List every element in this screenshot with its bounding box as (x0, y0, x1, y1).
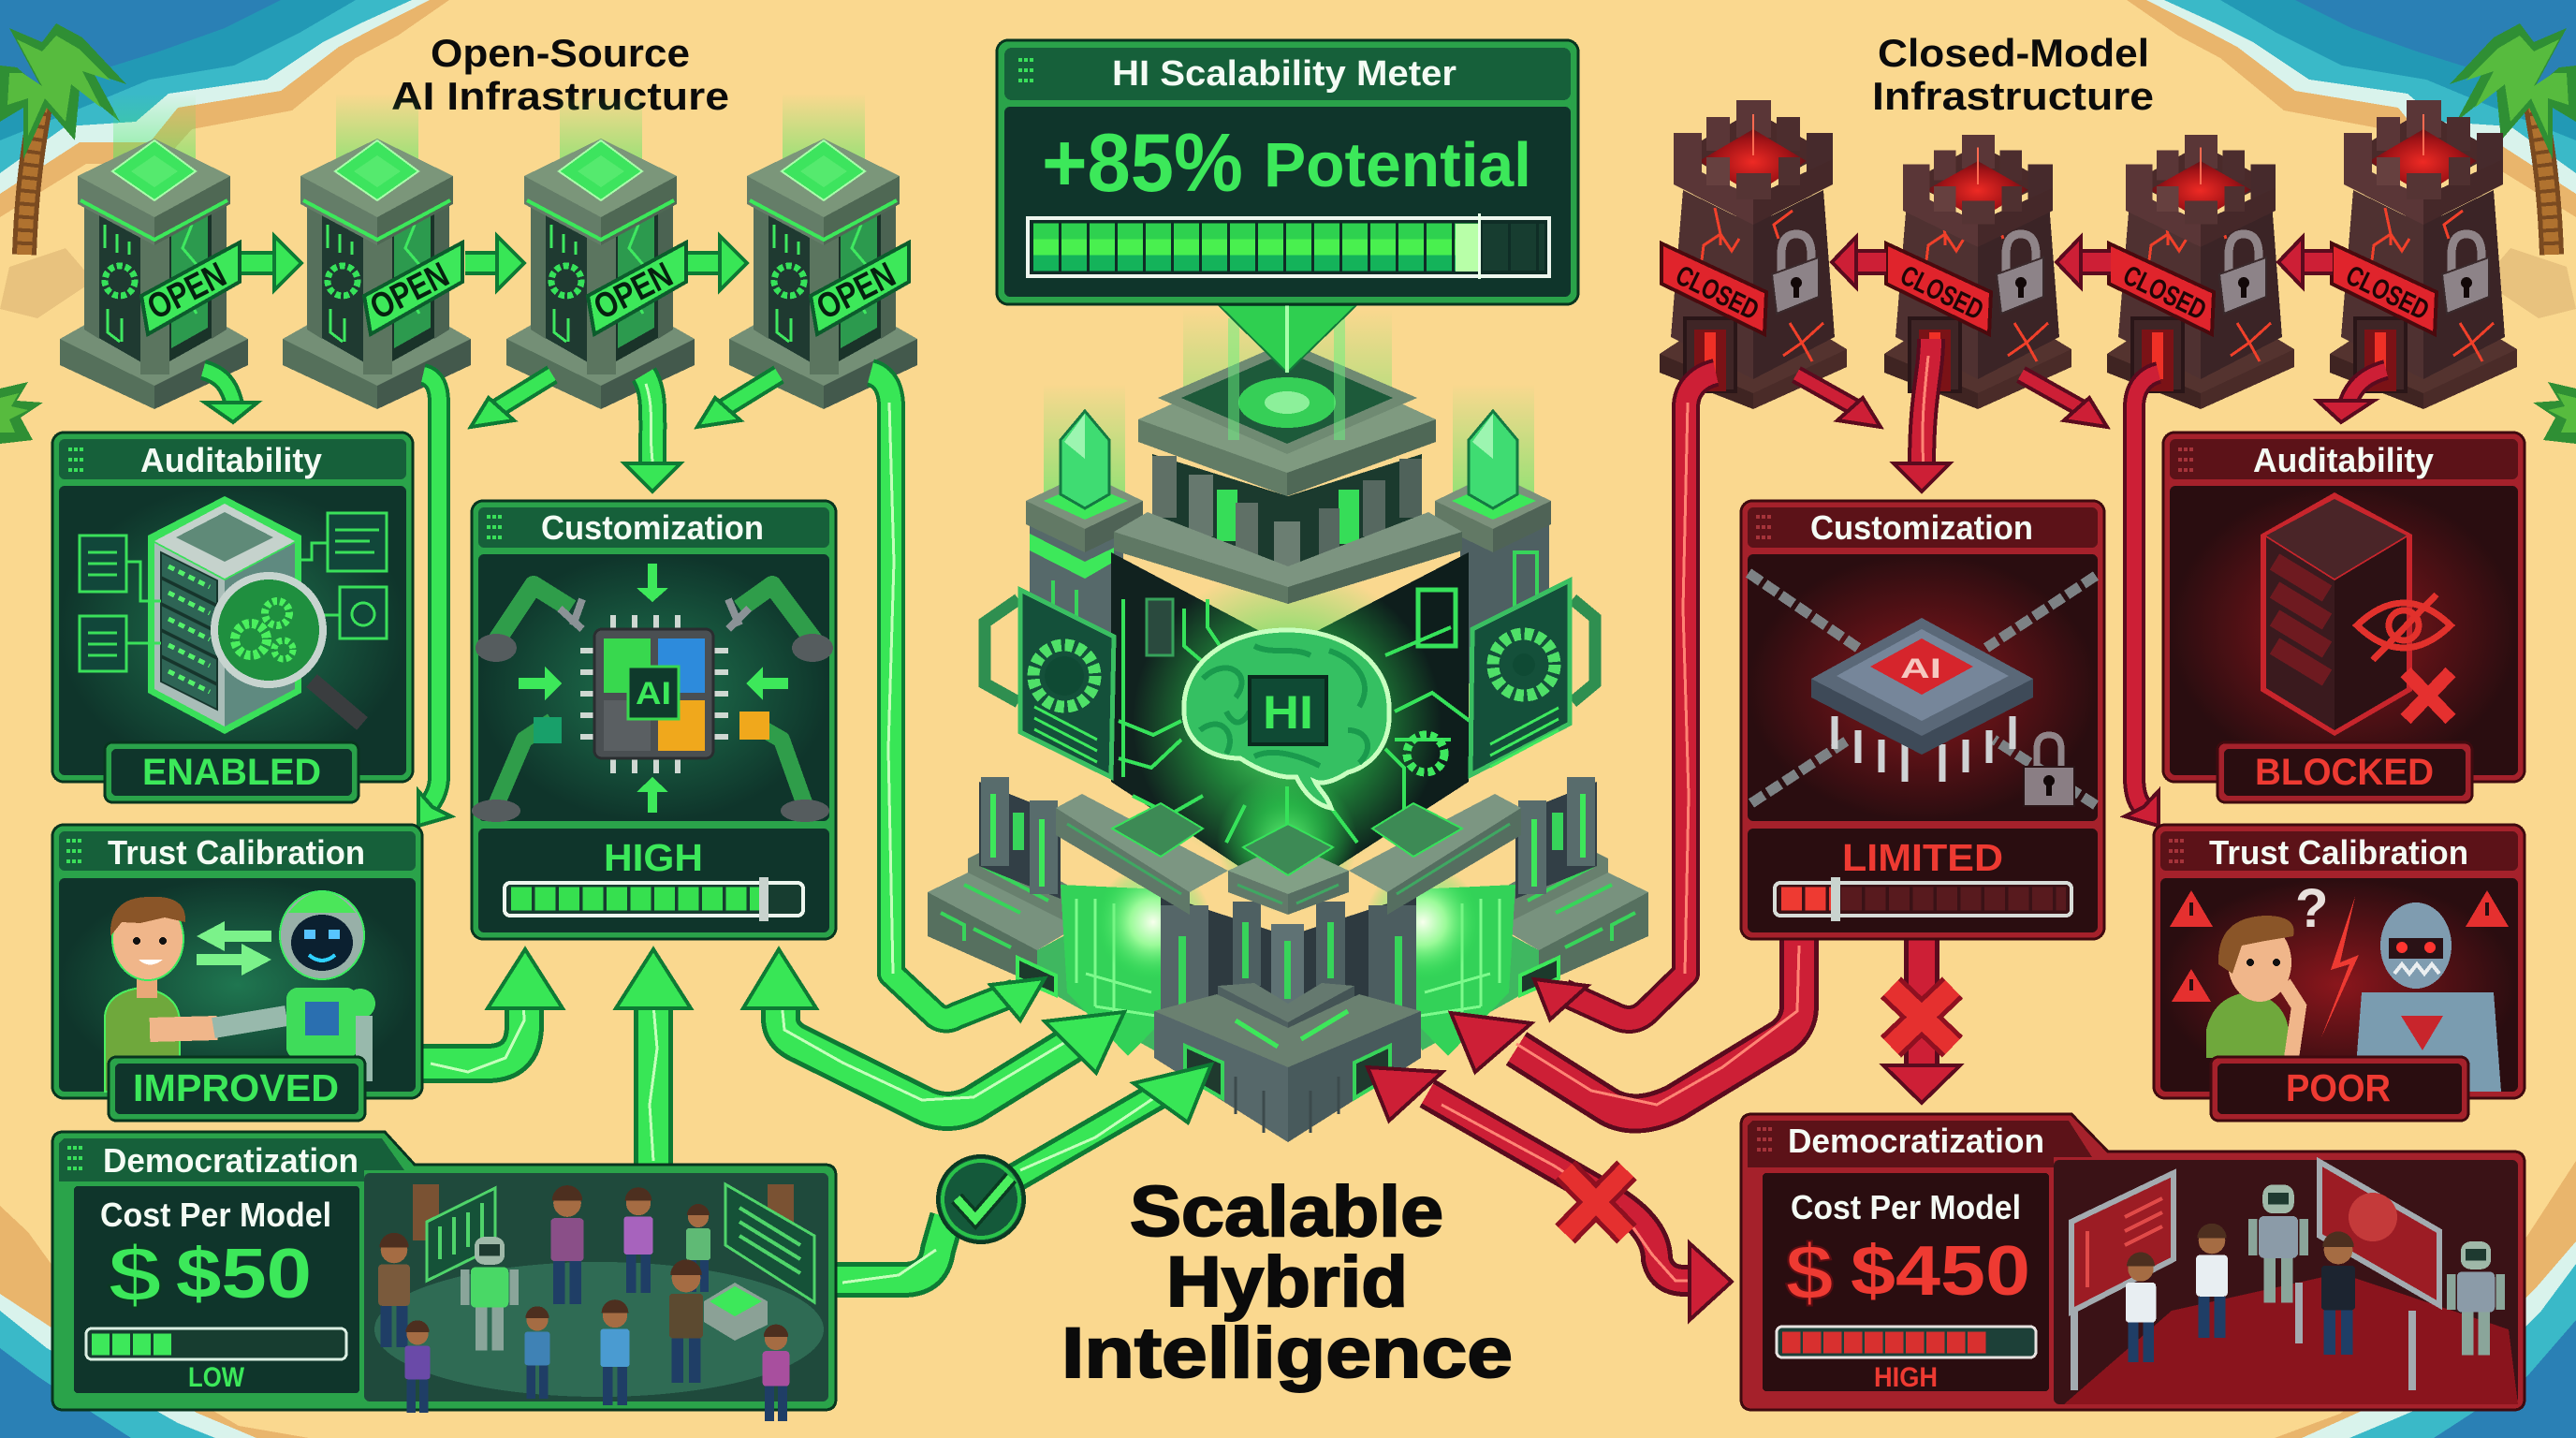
arrow: open 3 to open 4 (688, 236, 747, 290)
status badge (2211, 1057, 2468, 1121)
arrow: customization to temple (743, 949, 1124, 1111)
icon: exchange arrows (197, 921, 271, 976)
icon: padlock (2024, 735, 2074, 806)
panel: closed democratization (1741, 1114, 2525, 1410)
status badge: IMPROVED (133, 1066, 339, 1109)
panel: closed customization (1741, 501, 2104, 939)
main title: Intelligence (1061, 1313, 1513, 1393)
arrow: open 4 to temple (871, 373, 1045, 1020)
main title: Scalable (1130, 1172, 1443, 1252)
icon: locked AI chip (1811, 618, 2033, 782)
open tower 2 (283, 94, 471, 409)
status value: LIMITED (1842, 836, 2003, 879)
roof beams (1056, 794, 1521, 915)
cost card: $ (108, 1230, 162, 1318)
bush right (2533, 382, 2576, 444)
open tower 1: OPEN (141, 256, 232, 328)
closed tower 3 (2107, 135, 2294, 409)
cost card: LOW (188, 1362, 245, 1393)
heading: closed-model infrastructure: Infrastructure (1872, 74, 2154, 118)
cost card: $ (1785, 1228, 1834, 1316)
heading: closed-model infrastructure: Closed-Model (1878, 31, 2149, 75)
arrow: open 2 to open 3 (465, 236, 524, 290)
arrow: open 1 to auditability (203, 370, 257, 422)
open tower 3: OPEN (588, 256, 679, 328)
stanchions (2071, 1283, 2416, 1390)
arrow: customization to temple (red) (1451, 939, 1799, 1114)
lab people (2126, 1184, 2505, 1362)
icon: check badge (938, 1156, 1024, 1242)
icon: AI chip (580, 615, 728, 773)
icon: HI brain (1184, 630, 1389, 808)
cost card: $450 (1851, 1231, 2030, 1310)
crowd people (378, 1185, 789, 1421)
cost card: HIGH (1874, 1362, 1938, 1393)
icon: lightning bolt (2321, 897, 2359, 1037)
main title: Hybrid (1166, 1242, 1408, 1322)
icon: red X on democratization arrow (1565, 1170, 1627, 1234)
icon: robot arms (472, 585, 833, 822)
icon: crossed eye (2357, 594, 2451, 660)
beach and palm top left (0, 0, 449, 318)
heading: Customization (1810, 508, 2033, 547)
right wing of platform (1365, 777, 1648, 1056)
arrow: open 1 to open 2 (242, 236, 301, 290)
icon: server (148, 496, 301, 734)
arrow: closed 1 to customization branch (1796, 374, 1881, 427)
arrow from meter to temple (1219, 305, 1356, 373)
lower central columns (1161, 894, 1416, 1058)
status badge (109, 1057, 365, 1121)
icon: red X on customization arrow (1891, 988, 1953, 1047)
arrow: customization to democratization blocked (1883, 939, 1960, 1103)
main title (1061, 1172, 1513, 1393)
heading: Customization (541, 508, 764, 547)
open tower 2: OPEN (364, 256, 455, 328)
open tower 3 (506, 94, 695, 409)
status badge: ENABLED (142, 752, 321, 793)
panel: open customization (472, 501, 836, 939)
top slab (1138, 318, 1436, 496)
cost card: Cost Per Model (100, 1196, 331, 1234)
status badge: BLOCKED (2255, 752, 2434, 793)
icon: magnifier (214, 576, 362, 724)
beach and palm top right (2127, 0, 2576, 318)
arrow: open 2 to trust (418, 374, 451, 826)
right crystal tower (1435, 411, 1551, 683)
ocean bottom left (0, 1206, 309, 1438)
arrow: closed 3 to closed 2 (2056, 237, 2111, 287)
closed tower 3: CLOSED (2118, 260, 2211, 326)
meter panel (997, 40, 1578, 304)
closed tower 4: CLOSED (2341, 260, 2434, 326)
crowd illustration (364, 1173, 828, 1421)
bush left (0, 382, 43, 444)
icon: worried human (2206, 916, 2299, 1092)
closed tower 2 (1884, 135, 2071, 409)
heading: open-source infrastructure (391, 31, 729, 118)
arrow: open 4 to customization branch (697, 374, 779, 427)
panel: closed auditability (2163, 433, 2525, 802)
gated lab illustration (2054, 1160, 2518, 1404)
temple core dark faces (1111, 552, 1470, 913)
temple beams (1044, 309, 1534, 506)
icon: documents (80, 513, 387, 671)
closed tower 4 (2330, 100, 2517, 409)
right gear panel (1471, 580, 1595, 775)
panel: closed trust calibration (2154, 825, 2525, 1121)
meter heading: HI Scalability Meter (1112, 54, 1456, 94)
status value: HIGH (604, 836, 703, 879)
meter value: +85% (1042, 116, 1243, 209)
central temple (928, 305, 1648, 1142)
meter value: Potential (1264, 130, 1531, 200)
arrow: open 3 to trust branch (471, 374, 552, 427)
closed tower 1 (1660, 100, 1847, 409)
ocean bottom right (2275, 1161, 2576, 1438)
meter value (1042, 116, 1531, 209)
brain HI tag (1250, 677, 1326, 744)
heading: open-source infrastructure: Open-Source (431, 31, 690, 75)
level bar (505, 877, 803, 921)
open tower 4: OPEN (811, 256, 901, 328)
icon: hostile robot (2354, 902, 2501, 1092)
status badge: POOR (2286, 1066, 2391, 1109)
icon: human (105, 897, 217, 1092)
green arrows (203, 236, 1211, 1283)
brain HI tag: HI (1263, 686, 1313, 739)
meter bar (1028, 213, 1549, 279)
closed towers row (1660, 100, 2517, 409)
arrow: closed 4 to auditability (2318, 370, 2386, 422)
icon: AI chip: AI (636, 676, 671, 712)
arrow: democratization to temple (829, 1064, 1211, 1283)
arrow: closed 2 to closed 1 (1832, 237, 1886, 287)
middle slab (1114, 512, 1462, 604)
status badge (105, 742, 359, 802)
status badge (2217, 742, 2472, 802)
open tower 4 (729, 94, 917, 409)
screens (2071, 1162, 2439, 1312)
closed tower 1: CLOSED (1671, 260, 1764, 326)
cost card: $50 (176, 1234, 312, 1313)
heading: Trust Calibration (2209, 833, 2468, 872)
icon: red X (2406, 672, 2451, 719)
level bar (1775, 877, 2071, 921)
upper temple columns (1152, 454, 1422, 585)
icons: warning triangles (2170, 890, 2509, 1002)
icon: locked AI chip: AI (1900, 653, 1941, 684)
heading: Democratization (103, 1141, 359, 1180)
arrow: closed 4 to closed 3 (2278, 237, 2333, 287)
arrow: closed 2 to trust branch (2021, 374, 2107, 427)
red arrows (1368, 237, 2386, 1320)
arrow: temple to democratization blocked (1368, 1067, 1732, 1320)
icon: dark server (2261, 492, 2412, 736)
icon: inward arrows (519, 564, 788, 813)
closed tower 2: CLOSED (1895, 260, 1988, 326)
arrow: closed 1 to temple (1534, 373, 1716, 1020)
heading: Trust Calibration (108, 833, 365, 872)
icon: chains (1749, 573, 2096, 805)
icon: friendly robot (213, 891, 375, 1081)
arrow: trust to customization (422, 949, 563, 1072)
left wing of platform (928, 777, 1211, 1056)
cost card (72, 1184, 361, 1395)
panel: open auditability (52, 433, 413, 802)
cost card: Cost Per Model (1791, 1188, 2021, 1226)
heading: Auditability (140, 441, 322, 479)
panel: open democratization (52, 1132, 836, 1421)
open tower 1 (60, 94, 248, 409)
screens (427, 1184, 814, 1341)
arrow: closed 2 to customization (1894, 339, 1950, 492)
open towers row (60, 94, 917, 409)
heading: Democratization (1788, 1122, 2044, 1160)
heading: Auditability (2253, 441, 2434, 479)
left crystal tower (1026, 411, 1143, 683)
cost card (1761, 1171, 2051, 1393)
arrow: open 3 to customization (624, 374, 681, 492)
arrow: democratization to customization (616, 949, 691, 1165)
arrow: closed 3 to trust (2125, 373, 2159, 826)
panel: open trust calibration (52, 825, 422, 1121)
left gear panel (985, 590, 1114, 777)
icon: question mark: ? (2295, 878, 2328, 939)
heading: open-source infrastructure: AI Infrastructure (391, 74, 729, 118)
lower block (1154, 994, 1421, 1142)
heading: closed-model infrastructure (1872, 31, 2154, 118)
